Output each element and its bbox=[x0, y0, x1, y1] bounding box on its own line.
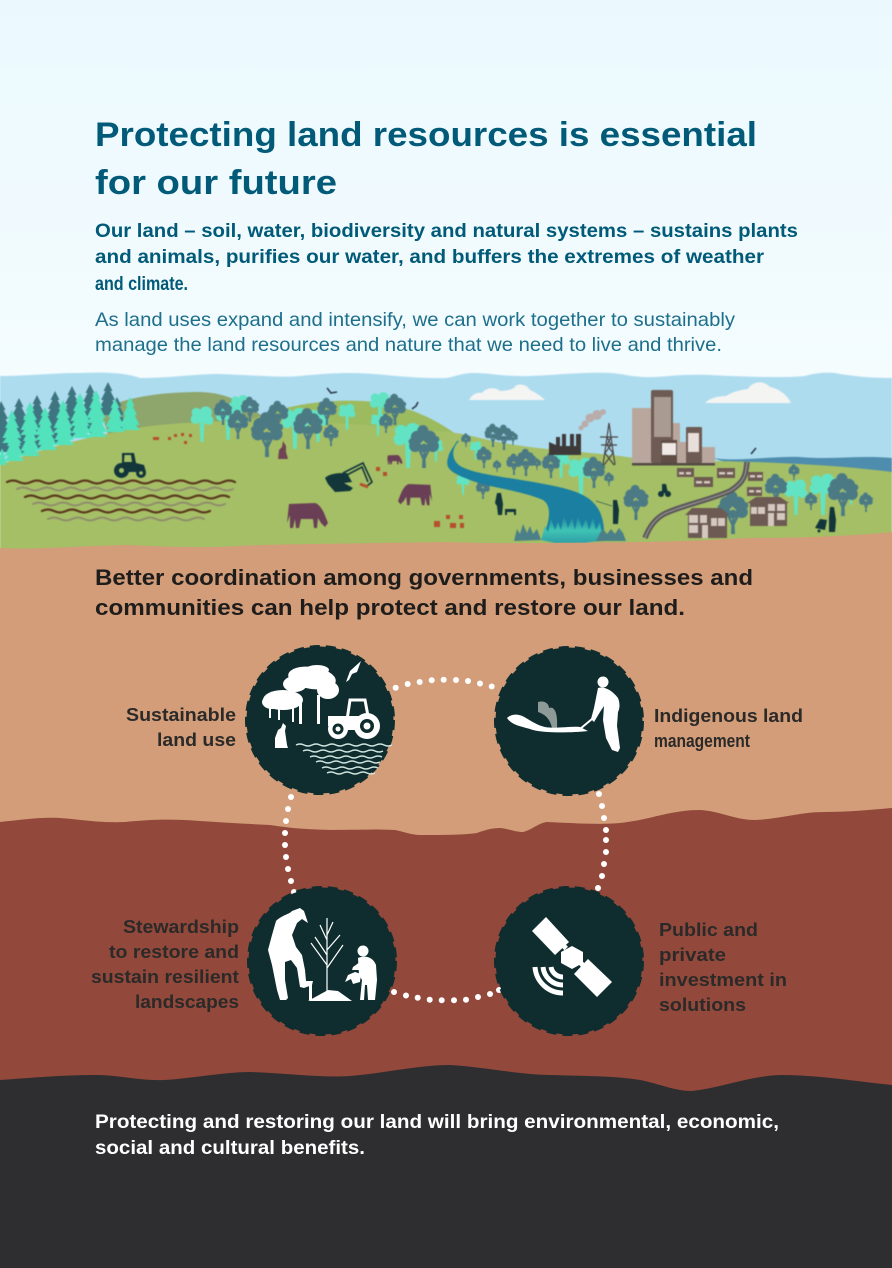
heading: coordination: communities can help protect and restore our land. bbox=[95, 595, 685, 620]
factory and smoke bbox=[549, 409, 606, 455]
title: Protecting land resources is essential bbox=[95, 116, 757, 154]
intro text: regular bbox=[95, 309, 735, 356]
river bbox=[447, 441, 604, 543]
intro text: regular: manage the land resources and nature that we need to live and thrive. bbox=[95, 334, 722, 356]
reeds: dark right bbox=[596, 528, 626, 541]
distant blue range bbox=[712, 457, 892, 472]
conifer forest bbox=[0, 382, 140, 465]
birds bbox=[327, 388, 756, 454]
icon: sustainable land use bbox=[246, 646, 394, 794]
landscape illustration bbox=[0, 373, 892, 560]
house windows bbox=[679, 472, 785, 538]
soil layer: tan bbox=[0, 532, 892, 860]
label: public and private investment: Public and bbox=[659, 919, 758, 940]
reeds: dark left bbox=[514, 524, 541, 541]
soil layer: dark bbox=[0, 1065, 892, 1268]
back hill: light green bbox=[250, 401, 470, 450]
back hill: olive bbox=[100, 392, 280, 440]
main green land bbox=[0, 421, 892, 560]
soil layer: red-brown bbox=[0, 808, 892, 1110]
dotted connectors bbox=[282, 677, 609, 1003]
label: stewardship: landscapes bbox=[135, 991, 239, 1012]
label: public and private investment: private bbox=[659, 944, 726, 965]
intro text: bold: and climate. bbox=[95, 273, 188, 295]
label: sustainable land use bbox=[126, 704, 236, 750]
clouds bbox=[469, 382, 791, 403]
ploughed field bbox=[7, 480, 235, 520]
tractor bbox=[114, 453, 146, 478]
label: sustainable land use: land use bbox=[157, 729, 236, 750]
title bbox=[95, 116, 757, 202]
title: for our future bbox=[95, 164, 337, 202]
kangaroo bbox=[278, 441, 288, 459]
excavator bbox=[325, 463, 372, 492]
closing statement: Protecting and restoring our land will bring environmental, economic, bbox=[95, 1111, 779, 1133]
closing statement bbox=[95, 1111, 779, 1159]
label: indigenous land management bbox=[654, 705, 803, 751]
heading: coordination bbox=[95, 565, 753, 620]
heading: coordination: Better coordination among governments, businesses and bbox=[95, 565, 753, 590]
label: stewardship: Stewardship bbox=[123, 916, 239, 937]
icon: satellite bbox=[496, 888, 642, 1034]
reeds: mint bbox=[541, 515, 603, 543]
eucalypt trees: mint bbox=[191, 392, 857, 515]
transmission pylon bbox=[600, 423, 618, 465]
cows bbox=[287, 446, 432, 528]
intro text: bold: Our land – soil, water, biodiversity and natural systems – sustains plants bbox=[95, 220, 798, 242]
label: stewardship: sustain resilient bbox=[91, 966, 239, 987]
icon: stewardship bbox=[248, 888, 396, 1034]
tree stumps bbox=[153, 433, 464, 528]
city buildings bbox=[632, 390, 715, 466]
suburban houses bbox=[677, 468, 789, 538]
intro text: regular: As land uses expand and intensify, we can work together to sustainably bbox=[95, 309, 735, 331]
intro text: bold: and animals, purifies our water, and buffers the extremes of weather bbox=[95, 246, 764, 268]
label: indigenous land management: management bbox=[654, 730, 750, 751]
label: indigenous land management: Indigenous land bbox=[654, 705, 803, 726]
people bbox=[495, 484, 836, 532]
eucalypt trees: dark bbox=[214, 394, 873, 534]
icon: indigenous land management bbox=[496, 648, 642, 794]
distant sky band bbox=[0, 373, 892, 480]
label: public and private investment: investment in bbox=[659, 969, 787, 990]
closing statement: social and cultural benefits. bbox=[95, 1137, 365, 1159]
label: stewardship: to restore and bbox=[109, 941, 239, 962]
background: sky bbox=[0, 0, 892, 560]
label: public and private investment: solutions bbox=[659, 994, 746, 1015]
label: sustainable land use: Sustainable bbox=[126, 704, 236, 725]
intro text: bold bbox=[95, 220, 798, 295]
road bbox=[645, 462, 747, 538]
label: stewardship bbox=[91, 916, 239, 1012]
label: public and private investment bbox=[659, 919, 787, 1015]
